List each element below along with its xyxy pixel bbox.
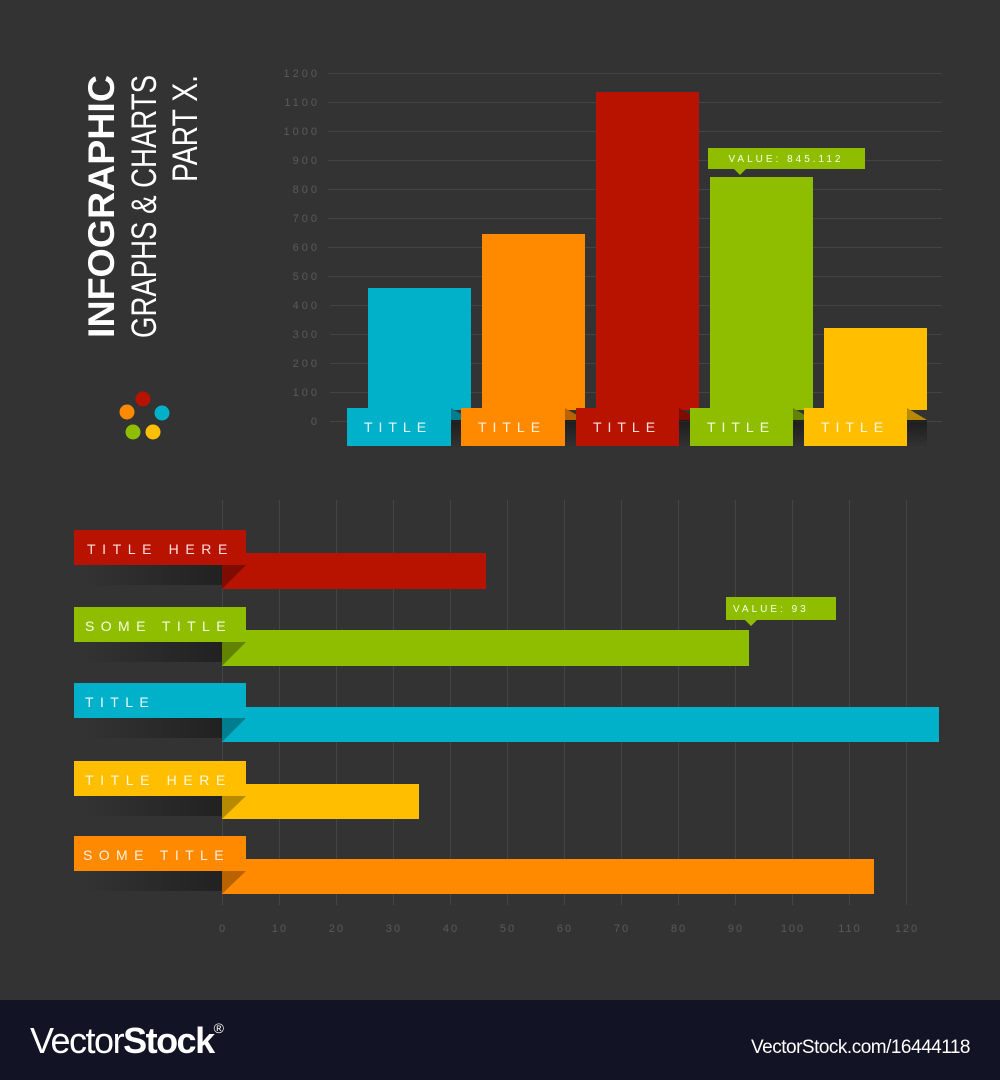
row: title here red: TITLE HERE [87, 541, 234, 557]
y axis labels and grid: 700 [293, 213, 320, 225]
x axis labels: 80 [671, 923, 687, 935]
callout: value 845.112 [708, 148, 865, 175]
bar: green: TITLE [707, 419, 775, 435]
x axis labels: 90 [728, 923, 744, 935]
title: GRAPHS & CHARTS [125, 75, 164, 338]
bar: green [690, 177, 813, 448]
x axis labels: 40 [443, 923, 459, 935]
callout: value 845.112: VALUE: 845.112 [728, 154, 844, 165]
row: title here yellow: TITLE HERE [85, 772, 232, 788]
x axis labels [219, 923, 919, 935]
row: some title orange [74, 836, 874, 894]
x axis labels: 30 [386, 923, 402, 935]
row: title blue: TITLE [85, 694, 155, 710]
bar: yellow [804, 328, 927, 448]
row: some title orange: SOME TITLE [83, 847, 230, 863]
column chart [284, 68, 942, 448]
x axis labels: 60 [557, 923, 573, 935]
x axis labels: 100 [781, 923, 805, 935]
y axis labels and grid: 800 [293, 184, 320, 196]
y axis labels and grid: 0 [311, 416, 320, 428]
title: INFOGRAPHIC [81, 75, 122, 338]
x axis labels: 20 [329, 923, 345, 935]
x axis labels: 120 [895, 923, 919, 935]
row: title here red [74, 530, 486, 589]
y axis labels and grid: 1200 [284, 68, 320, 80]
callout: value 93 [726, 597, 836, 626]
row: some title green [74, 607, 749, 666]
y axis labels and grid: 600 [293, 242, 320, 254]
title: PART X. [166, 75, 205, 182]
bar: red [576, 92, 699, 448]
footer: VectorStock.com/16444118 [751, 1037, 970, 1058]
icon: colored dots [120, 392, 170, 440]
y axis labels and grid: 200 [293, 358, 320, 370]
y axis labels and grid: 1000 [284, 126, 320, 138]
x axis labels: 0 [219, 923, 227, 935]
bar: red: TITLE [593, 419, 661, 435]
bar: orange: TITLE [478, 419, 546, 435]
y axis labels and grid: 100 [293, 387, 320, 399]
x axis labels: 50 [500, 923, 516, 935]
y axis labels and grid: 300 [293, 329, 320, 341]
row: some title green: SOME TITLE [85, 618, 232, 634]
footer [0, 1000, 1000, 1080]
y axis labels and grid [284, 68, 942, 428]
row: title blue [74, 683, 939, 742]
row: title here yellow [74, 761, 419, 819]
bar: orange [461, 234, 585, 448]
y axis labels and grid: 1100 [284, 97, 320, 109]
bar: yellow: TITLE [821, 419, 889, 435]
bar: blue [347, 288, 471, 448]
y axis labels and grid: 900 [293, 155, 320, 167]
bar: blue: TITLE [364, 419, 432, 435]
callout: value 93: VALUE: 93 [733, 604, 809, 615]
footer: ® [214, 1020, 225, 1036]
title [81, 75, 205, 338]
bar chart: horizontal [74, 500, 939, 935]
x axis labels: 110 [838, 923, 862, 935]
footer: VectorStock [30, 1020, 214, 1061]
y axis labels and grid: 500 [293, 271, 320, 283]
x axis labels: 10 [272, 923, 288, 935]
y axis labels and grid: 400 [293, 300, 320, 312]
x axis labels: 70 [614, 923, 630, 935]
